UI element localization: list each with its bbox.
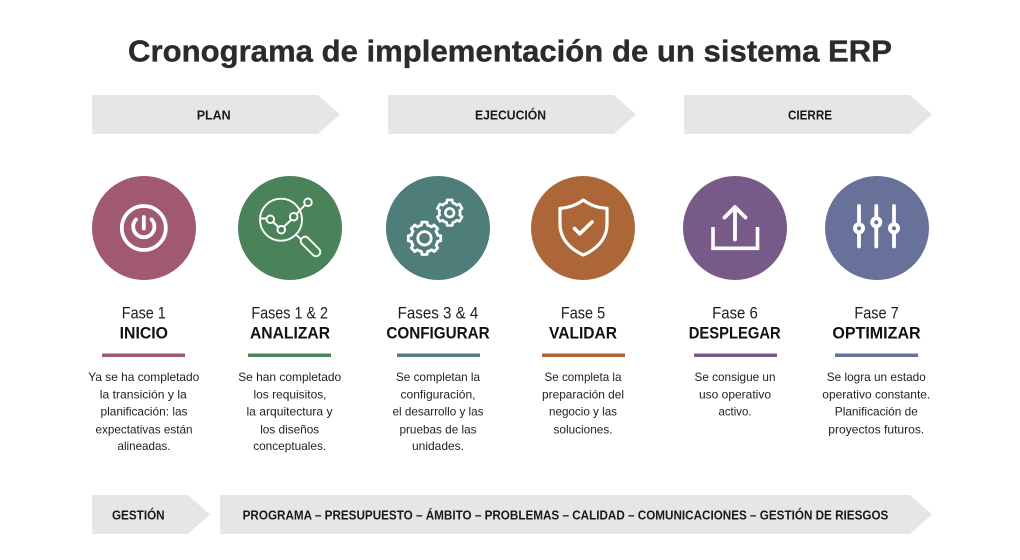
icon: sliders — [825, 176, 929, 280]
arrow: ejecución — [388, 95, 636, 134]
arrow: cierre: CIERRE — [788, 109, 832, 123]
panel: fase 5 validar — [531, 176, 635, 436]
arrow: gestión: GESTIÓN — [112, 508, 165, 523]
description — [238, 370, 342, 453]
description: negocio y las — [549, 405, 617, 419]
phase label: Fases 3 & 4 — [398, 303, 478, 322]
arrow: plan: PLAN — [197, 109, 231, 123]
description: unidades. — [412, 439, 464, 453]
colour bar — [397, 354, 480, 357]
arrow: ejecución: EJECUCIÓN — [475, 108, 546, 123]
description: activo. — [718, 405, 752, 419]
icon: magnifier with chart — [238, 176, 342, 280]
description — [694, 370, 776, 419]
colour bar — [835, 354, 918, 357]
description: los requisitos, — [254, 387, 326, 401]
icon: power button — [92, 176, 196, 280]
description: preparación del — [542, 387, 624, 401]
description: alineadas. — [118, 439, 170, 453]
panel: fase 6 desplegar — [683, 176, 787, 419]
title: Cronograma de implementación de un sistema ERP — [128, 34, 892, 69]
description: Se han completado — [238, 370, 342, 384]
description — [542, 370, 624, 436]
phase label: Fase 7 — [854, 303, 899, 322]
description — [88, 370, 200, 453]
phase label: Fase 1 — [122, 303, 166, 322]
arrow: management areas: PROGRAMA – PRESUPUESTO – ÁMBITO – PROBLEMAS – CALIDAD – COMUNICACIONES – GESTIÓN DE RIESGOS — [243, 508, 888, 523]
arrow: plan — [92, 95, 340, 134]
panel: fases 1 y 2 analizar — [238, 176, 342, 453]
description: Ya se ha completado — [88, 370, 200, 384]
description: conceptuales. — [253, 439, 326, 453]
description: soluciones. — [554, 422, 612, 436]
description — [392, 370, 484, 453]
phase name: VALIDAR — [549, 324, 617, 342]
colour bar — [248, 354, 331, 357]
phase name: OPTIMIZAR — [832, 324, 921, 342]
description: operativo constante. — [822, 387, 930, 401]
description: la transición y la — [100, 387, 187, 401]
description: Se consigue un — [694, 370, 776, 384]
phase label: Fase 6 — [712, 303, 758, 322]
phase label: Fases 1 & 2 — [251, 303, 328, 322]
colour bar — [694, 354, 777, 357]
phase name: CONFIGURAR — [386, 324, 490, 342]
icon: shield with check — [531, 176, 635, 280]
phase name: INICIO — [120, 324, 168, 342]
description: los diseños — [260, 422, 319, 436]
icon: gears — [386, 176, 490, 280]
description: configuración, — [400, 387, 476, 401]
description: pruebas de las — [400, 422, 476, 436]
description — [822, 370, 930, 436]
description: Planificación de — [835, 405, 918, 419]
description: Se logra un estado — [827, 370, 926, 384]
description: planificación: las — [100, 405, 188, 419]
description: el desarrollo y las — [392, 405, 484, 419]
phase name: ANALIZAR — [250, 324, 330, 342]
description: expectativas están — [96, 422, 192, 436]
description: la arquitectura y — [246, 405, 332, 419]
description: Se completa la — [544, 370, 622, 384]
arrow: management areas — [220, 495, 932, 534]
description: proyectos futuros. — [828, 422, 924, 436]
phase name: DESPLEGAR — [689, 324, 781, 342]
colour bar — [102, 354, 185, 357]
colour bar — [542, 354, 625, 357]
arrow: cierre — [684, 95, 932, 134]
panel: fase 7 optimizar — [822, 176, 930, 436]
description: uso operativo — [699, 387, 771, 401]
phase label: Fase 5 — [561, 303, 605, 322]
panel: fases 3 y 4 configurar — [386, 176, 490, 453]
panel: fase 1 inicio — [88, 176, 200, 453]
description: Se completan la — [396, 370, 480, 384]
arrow: gestión — [92, 495, 210, 534]
icon: upload — [683, 176, 787, 280]
